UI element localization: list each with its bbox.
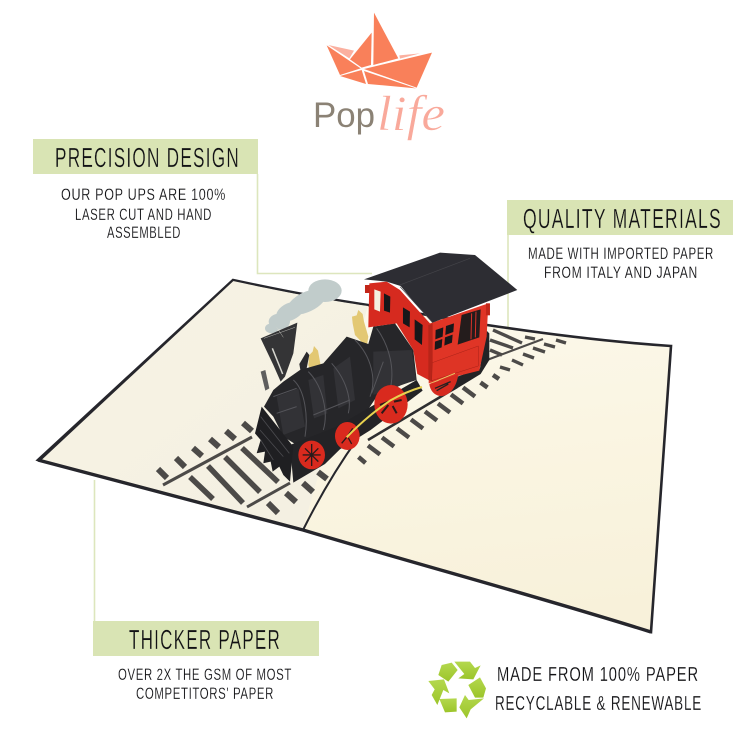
guide lines connecting the labels to the card (94, 174, 508, 621)
heading: THICKER PAPER (129, 624, 281, 655)
illustration: paper locomotive (255, 253, 517, 483)
heading band (33, 139, 258, 174)
cab side windows (374, 289, 423, 345)
cab trim (431, 373, 455, 383)
description: LASER CUT AND HAND (75, 206, 212, 224)
heading: PRECISION DESIGN (55, 142, 240, 173)
cab roof (364, 253, 517, 323)
open pop-up card (38, 253, 671, 632)
icon: recycling arrows (428, 662, 486, 718)
middle wheel (335, 422, 360, 450)
panel: quality materials (507, 200, 733, 282)
cab side wall (368, 282, 430, 380)
heading band (507, 200, 733, 235)
card centre fold (303, 438, 358, 530)
cab front door panel (432, 346, 478, 381)
cab rear wheel spokes (435, 382, 451, 391)
yellow connecting rod (347, 387, 422, 437)
description: COMPETITORS' PAPER (136, 685, 274, 703)
cab rear wheel (429, 374, 458, 396)
card bottom edge (38, 460, 651, 632)
description: OUR POP UPS ARE 100% (61, 186, 226, 204)
roof brackets (365, 285, 490, 315)
description: ASSEMBLED (107, 224, 181, 242)
note text (495, 663, 702, 715)
cab corner post (428, 323, 433, 382)
cowcatcher (255, 407, 293, 482)
running board (290, 380, 423, 483)
description (118, 666, 292, 703)
left page shading (41, 281, 368, 528)
cab rear under-frame (430, 330, 489, 391)
heading band (93, 621, 319, 656)
left track (158, 423, 327, 513)
cab front wall (429, 303, 488, 383)
front wheel (298, 441, 325, 469)
smokestack (261, 323, 297, 382)
smokestack details (264, 327, 295, 374)
yellow paper figures (308, 310, 368, 380)
wordmark: Pop: Pop (313, 96, 375, 135)
large drive wheel (374, 385, 408, 424)
card left top edge (40, 280, 233, 460)
description: OVER 2X THE GSM OF MOST (118, 666, 292, 684)
description (61, 186, 226, 242)
boiler facets (277, 350, 416, 435)
logo: Poplife (313, 13, 445, 141)
card pages (38, 280, 671, 632)
front lamp (261, 370, 269, 391)
boiler ribs (273, 328, 392, 437)
boiler (264, 323, 417, 445)
description (528, 245, 714, 282)
cab front large window (458, 309, 481, 345)
cab front four-pane window (435, 323, 454, 350)
right track (358, 330, 566, 463)
small figure (299, 352, 309, 372)
panel: precision design (33, 139, 258, 242)
roof highlights (400, 258, 470, 323)
panel: recyclable note (428, 662, 702, 718)
smoke (265, 279, 342, 333)
panel: thicker paper (93, 621, 319, 703)
window frames (471, 312, 476, 339)
cowcatcher slats (260, 417, 289, 460)
wordmark: life: life (377, 85, 445, 141)
icon: origami paper boat (327, 13, 432, 88)
